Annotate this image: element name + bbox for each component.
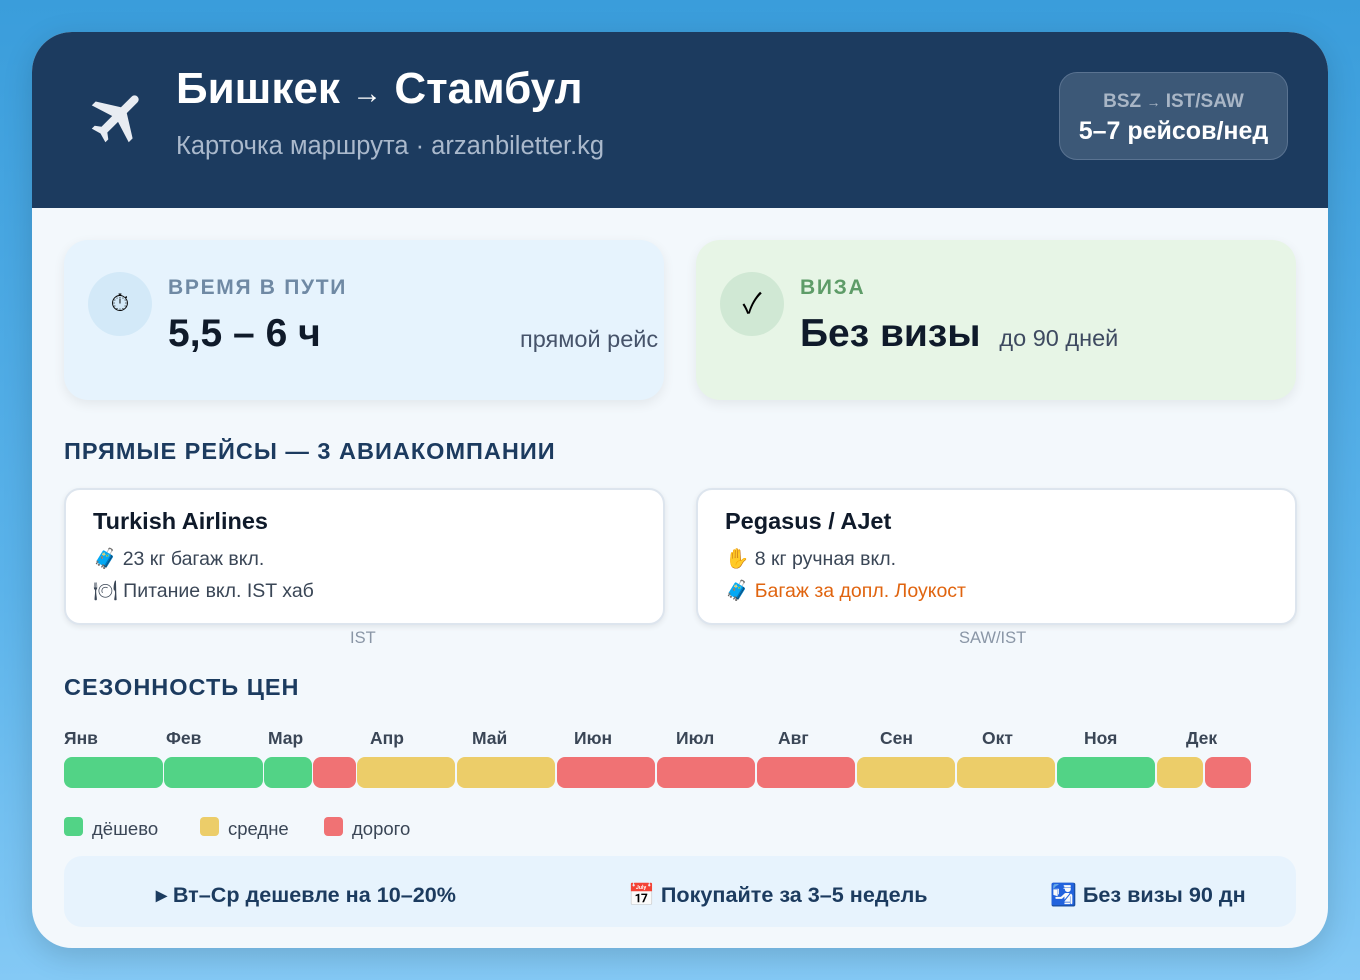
badge: flights per week — [1059, 72, 1288, 160]
icon: check — [720, 272, 784, 336]
airline: Turkish: Turkish Airlines — [93, 508, 268, 534]
header band — [32, 32, 1328, 208]
season chart: Июл — [676, 728, 714, 748]
value: 5,5 – 6 ч — [168, 312, 321, 355]
value: Без визы до 90 дней — [800, 312, 1118, 355]
badge: flights per week: BSZ → IST/SAW — [1103, 91, 1244, 112]
airline: Pegasus: ✋ 8 кг ручная вкл. — [725, 548, 896, 570]
season chart: Авг — [778, 728, 809, 748]
airline: Turkish: 🍽 Питание вкл. IST хаб — [93, 580, 314, 602]
panel: visa — [696, 240, 1296, 400]
icon: check: ✓ — [742, 288, 762, 319]
heading: seasonality: СЕЗОННОСТЬ ЦЕН — [64, 674, 300, 700]
title: Бишкек → Стамбул — [176, 64, 583, 113]
icon: plane — [92, 95, 139, 142]
season chart: Май — [472, 728, 507, 748]
badge: flights per week: 5–7 рейсов/нед — [1079, 117, 1268, 145]
season chart: Сен — [880, 728, 913, 748]
airport label SAW/IST: SAW/IST — [959, 629, 1026, 647]
label: ВРЕМЯ В ПУТИ — [168, 276, 347, 299]
legend: дорого — [352, 818, 410, 839]
season chart: Мар — [268, 728, 303, 748]
season chart: Окт — [982, 728, 1013, 748]
tips bar: 📅 Покупайте за 3–5 недель — [628, 882, 928, 907]
icon: stopwatch: ⏱ — [111, 290, 129, 317]
legend — [64, 817, 410, 839]
season chart: Янв — [64, 728, 98, 748]
season chart: Апр — [370, 728, 404, 748]
subtitle: Карточка маршрута · arzanbiletter.kg — [176, 132, 604, 160]
airline: Pegasus: 🧳 Багаж за допл. Лоукост — [725, 580, 966, 602]
heading: direct flights: ПРЯМЫЕ РЕЙСЫ — 3 АВИАКОМПАНИИ — [64, 438, 556, 464]
note: прямой рейс — [520, 326, 658, 352]
season chart: Фев — [166, 728, 201, 748]
airline: Turkish: 🧳 23 кг багаж вкл. — [93, 548, 264, 570]
airport label IST: IST — [350, 629, 376, 647]
season chart: Июн — [574, 728, 612, 748]
airline: Pegasus: Pegasus / AJet — [725, 508, 891, 534]
season chart: Ноя — [1084, 728, 1117, 748]
legend: средне — [228, 818, 289, 839]
panel: travel time — [64, 240, 664, 400]
legend: дёшево — [92, 818, 158, 839]
season chart: Дек — [1186, 728, 1217, 748]
tips bar: ▸ Вт–Ср дешевле на 10–20% — [156, 882, 456, 907]
tips bar — [64, 856, 1296, 927]
airline: Pegasus — [696, 488, 1297, 625]
label: ВИЗА — [800, 276, 865, 299]
airline: Turkish — [64, 488, 665, 625]
icon: stopwatch — [88, 272, 152, 336]
tips bar: 🛂 Без визы 90 дн — [1050, 882, 1246, 907]
